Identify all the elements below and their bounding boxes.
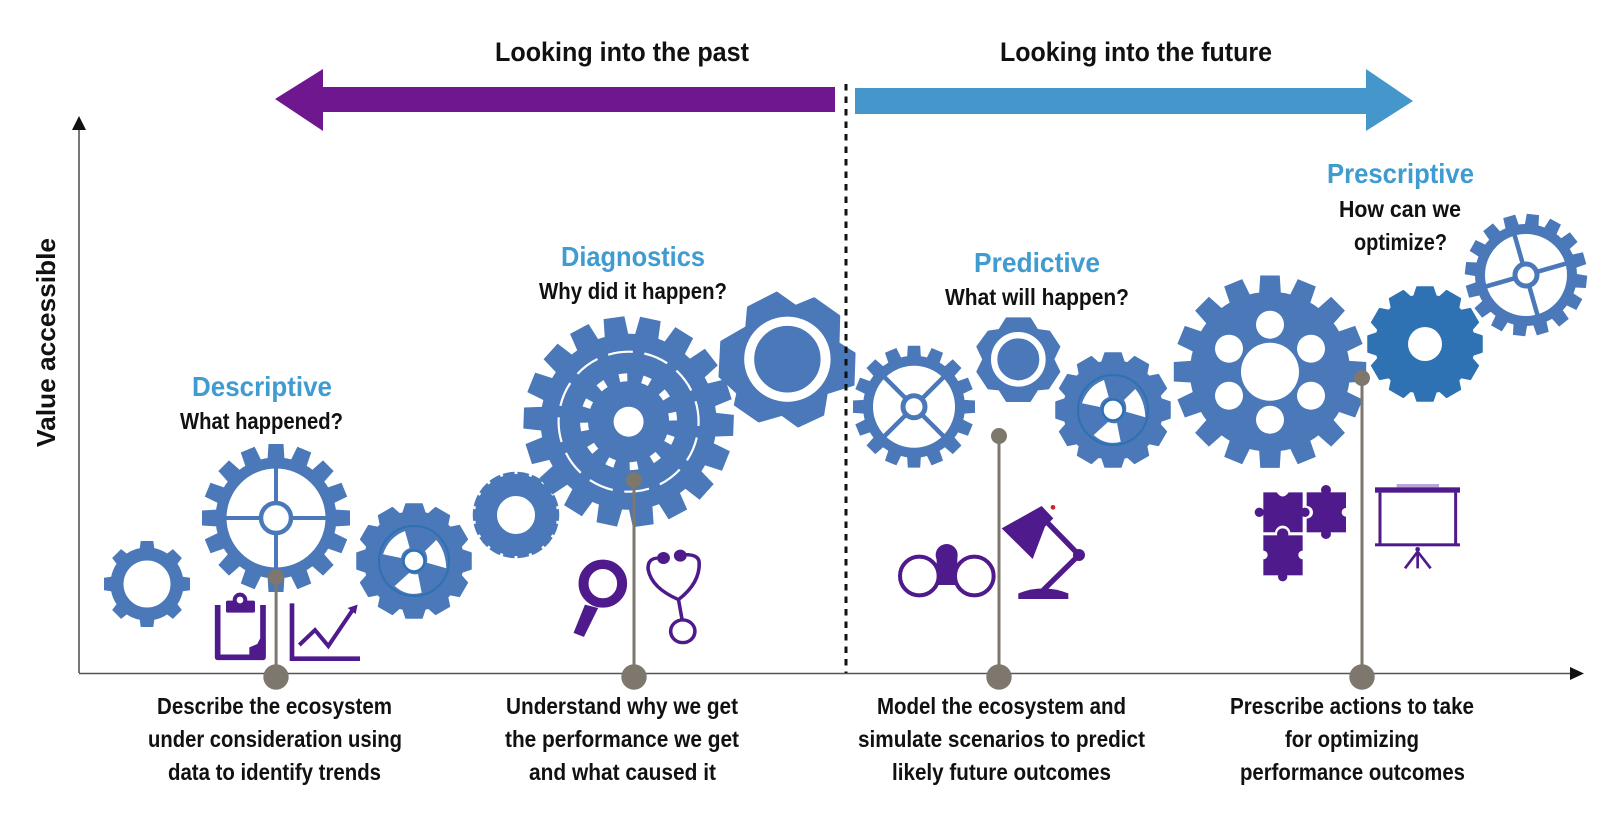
text: model: simulate scenarios to predict	[858, 726, 1145, 752]
icon: projector screen	[1375, 484, 1460, 568]
text: describe: data to identify trends	[168, 759, 381, 785]
label: descriptive: Descriptive	[192, 371, 332, 402]
arrow: future	[855, 69, 1413, 131]
label: descriptive: What happened?	[180, 408, 343, 434]
heading: looking into the past: Looking into the past	[495, 37, 749, 67]
label: predictive	[945, 247, 1129, 310]
gear 3: wedged	[357, 504, 471, 618]
pin: diagnostics	[621, 472, 647, 690]
gear 2: spoked	[171, 413, 381, 623]
arrow: past	[275, 69, 835, 131]
gear 4: fine teeth	[474, 474, 558, 556]
pin: descriptive	[263, 569, 289, 690]
icon: puzzle pieces	[1255, 485, 1350, 581]
x axis	[79, 667, 1584, 680]
icon: magnifier	[574, 564, 622, 637]
label: prescriptive: optimize?	[1354, 229, 1447, 255]
label: prescriptive	[1327, 158, 1474, 255]
pin: predictive	[986, 428, 1012, 690]
text: prescribe: performance outcomes	[1240, 759, 1465, 785]
text: prescribe	[1230, 693, 1474, 785]
text: describe: under consideration using	[148, 726, 402, 752]
text: understand	[505, 693, 739, 785]
label: prescriptive: Prescriptive	[1327, 158, 1474, 189]
text: model	[858, 693, 1145, 785]
gear 5: large diagnostic	[504, 297, 754, 546]
gear 11: dark blue	[1368, 287, 1482, 401]
divider: past and future	[844, 84, 848, 673]
y axis label: Value accessible	[31, 238, 61, 447]
text: prescribe: for optimizing	[1285, 726, 1419, 752]
icon: desk lamp	[1002, 505, 1085, 599]
label: diagnostics: Why did it happen?	[539, 278, 727, 304]
label: descriptive	[180, 371, 343, 434]
label: diagnostics: Diagnostics	[561, 241, 705, 272]
gear 7: X spokes	[828, 320, 1000, 493]
text: model: likely future outcomes	[892, 759, 1111, 785]
text: understand: Understand why we get	[506, 693, 738, 719]
text: describe	[148, 693, 402, 785]
label: predictive: What will happen?	[945, 284, 1129, 310]
heading: looking into the future: Looking into the future	[1000, 37, 1272, 67]
text: prescribe: Prescribe actions to take	[1230, 693, 1474, 719]
label: diagnostics	[539, 241, 727, 304]
text: understand: and what caused it	[529, 759, 716, 785]
y axis	[72, 116, 86, 673]
pin: prescriptive	[1349, 370, 1375, 690]
icon: stethoscope	[648, 551, 699, 643]
text: model: Model the ecosystem and	[877, 693, 1126, 719]
icon: binoculars	[900, 544, 994, 595]
label: predictive: Predictive	[974, 247, 1100, 278]
gear 8: six lobes	[977, 318, 1059, 401]
gear 9: wedged	[1056, 353, 1170, 467]
icon: clipboard	[218, 593, 266, 657]
gear 6: lobed with white ring	[720, 293, 855, 426]
gears	[104, 180, 1610, 627]
gear 12: rotated spokes	[1431, 180, 1610, 370]
icon: line chart	[292, 603, 360, 659]
text: understand: the performance we get	[505, 726, 739, 752]
gear 10: six holes	[1134, 236, 1406, 508]
gear 1: small ring	[104, 541, 190, 627]
text: describe: Describe the ecosystem	[157, 693, 392, 719]
label: prescriptive: How can we	[1339, 196, 1461, 222]
